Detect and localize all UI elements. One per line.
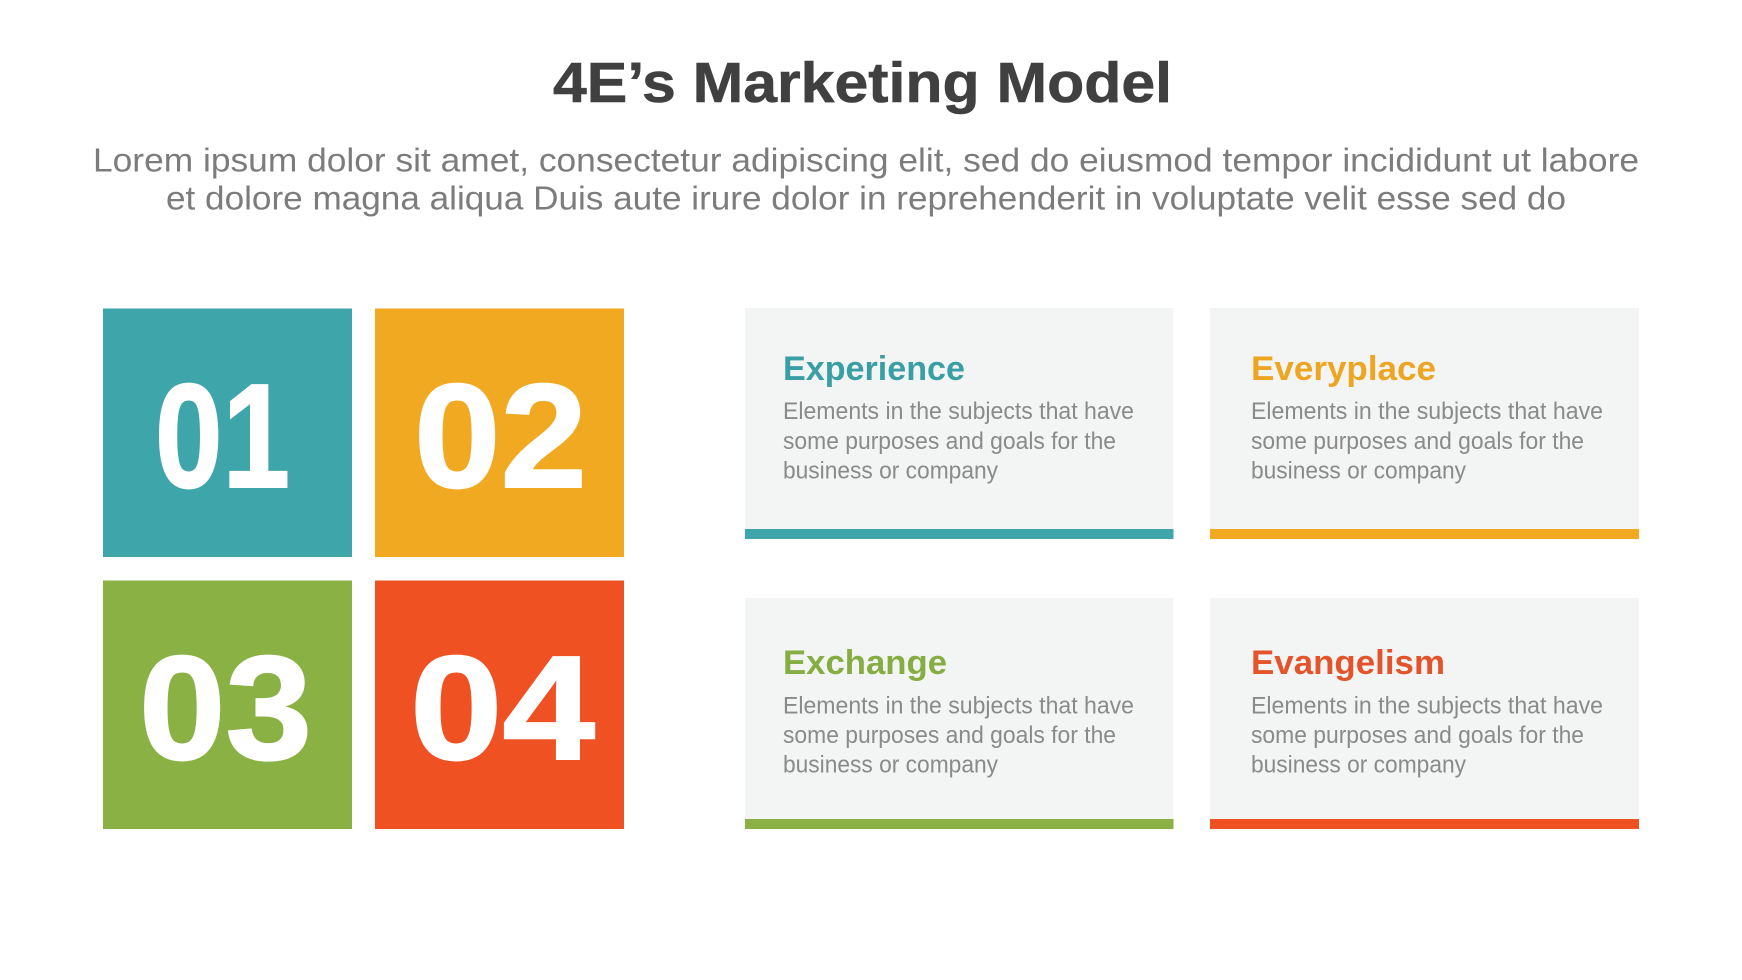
- heading: Experience: Experience: [783, 350, 965, 388]
- panel: Everyplace: [1210, 308, 1639, 539]
- body: Experience: business or company: [783, 458, 998, 484]
- tile 03: [103, 580, 352, 829]
- panel: Exchange: [745, 598, 1174, 829]
- heading: Everyplace: Everyplace: [1251, 350, 1436, 388]
- body: Experience: [783, 398, 1134, 484]
- body: Exchange: [783, 692, 1134, 778]
- body: Exchange: some purposes and goals for the: [783, 722, 1116, 749]
- body: Exchange: Elements in the subjects that have: [783, 692, 1134, 720]
- body: Everyplace: [1251, 398, 1603, 484]
- heading: Evangelism: Evangelism: [1251, 644, 1445, 682]
- subtitle: Lorem ipsum dolor sit amet, consectetur adipiscing elit, sed do eiusmod tempor incididunt ut labore: [93, 142, 1639, 178]
- heading: Exchange: Exchange: [783, 644, 947, 682]
- body: Everyplace: some purposes and goals for the: [1251, 428, 1584, 455]
- body: Evangelism: [1251, 692, 1603, 778]
- title: 4E’s Marketing Model: [553, 51, 1172, 115]
- number grid: [103, 308, 624, 829]
- body: Evangelism: Elements in the subjects that have: [1251, 692, 1603, 720]
- subtitle: et dolore magna aliqua Duis aute irure dolor in reprehenderit in voluptate velit esse sed do: [166, 180, 1566, 216]
- body: Experience: some purposes and goals for the: [783, 428, 1116, 455]
- tile 04: [375, 580, 624, 829]
- tile 02: [375, 308, 624, 557]
- panel: Experience: [745, 308, 1174, 539]
- body: Experience: Elements in the subjects that have: [783, 398, 1134, 425]
- tile 03: 03: [139, 626, 312, 791]
- subtitle: [93, 142, 1639, 216]
- tile 01: 01: [155, 354, 290, 519]
- body: Evangelism: business or company: [1251, 752, 1466, 778]
- tile 02: 02: [414, 354, 587, 519]
- panel: Evangelism: [1210, 598, 1639, 829]
- tile 04: 04: [410, 626, 595, 791]
- body: Everyplace: business or company: [1251, 458, 1466, 484]
- body: Evangelism: some purposes and goals for the: [1251, 722, 1584, 749]
- body: Exchange: business or company: [783, 752, 998, 778]
- body: Everyplace: Elements in the subjects that have: [1251, 398, 1603, 425]
- tile 01: [103, 308, 352, 557]
